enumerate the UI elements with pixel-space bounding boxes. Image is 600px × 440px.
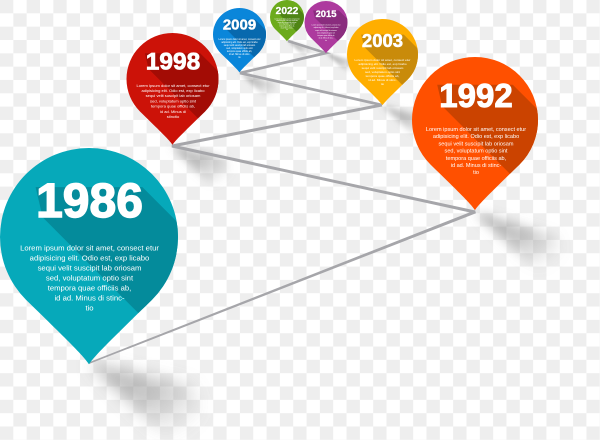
pin: 1998: id ad. Minus di (160, 109, 186, 114)
pin: 1992: tempora quae officiis ab, (446, 156, 507, 162)
pin: 2003: 2003 (362, 30, 403, 51)
zigzag timeline connector (89, 41, 476, 364)
pin: 2003 (347, 19, 418, 106)
pin: 2009: 2009 (223, 16, 256, 34)
pin: 2009: sequi velit suscipit lab oriosam (224, 44, 255, 47)
pin: 1998: 1998 (146, 48, 200, 76)
pin: 2015: adipisicing elit. Odio est, exp licabo (314, 26, 339, 29)
pin: 1992 (412, 57, 538, 210)
shadows cast by the pins (89, 41, 563, 435)
pin: 2009: tempora quae officiis ab, (227, 50, 253, 53)
pin: 1986: 1986 (36, 175, 143, 228)
pin: 1992: sequi velit suscipit lab oriosam (439, 141, 514, 147)
pin: 2022 (270, 0, 304, 42)
pin: 1998: adipisicing elit. Odio est, exp licabo (142, 88, 205, 93)
pin: 2022: sequi velit suscipit lab oriosam (278, 21, 297, 24)
pin: 1986 (0, 148, 178, 364)
pin: 1998: stinctio (167, 114, 180, 119)
pin: 1992: id ad. Minus di stinc- (451, 163, 501, 169)
pin: 1986: adipisicing elit. Odio est, exp licabo (30, 254, 149, 263)
pin: 1998: Lorem ipsum dolor sit amet, consect etur (136, 83, 210, 88)
pin: 2003: Lorem ipsum dolor sit amet, consect etur (355, 58, 410, 62)
pin: 2009: Lorem ipsum dolor sit amet, consect etur (218, 38, 261, 41)
pin: 1998: sed, voluptatum optio sint (150, 98, 197, 103)
pin: 1992: adipisicing elit. Odio est, exp licabo (433, 134, 519, 140)
pin: 1992: tio (473, 170, 479, 176)
pin: 1986: tio (85, 304, 94, 313)
pin: 2015: 2015 (316, 8, 336, 19)
pin: 2009: id ad. Minus di stinc- (229, 53, 250, 56)
pin: 2022: sed, voluptatum optio sint (279, 23, 295, 26)
pin: 1992: sed, voluptatum optio sint (445, 149, 508, 155)
pin: 2009: sed, voluptatum optio sint (226, 47, 253, 50)
pin: 2015 (304, 1, 348, 54)
pin: 2003: sed, voluptatum optio sint (365, 70, 400, 74)
pin: 1992: Lorem ipsum dolor sit amet, consect etur (426, 127, 526, 133)
pin: 2022: tio (286, 28, 288, 31)
pin: 2003: id ad. Minus di stinc- (368, 78, 397, 82)
pin: 2022: id ad. Minus di stinc- (281, 26, 294, 29)
pin: 2015: Lorem ipsum dolor sit amet, consect etur (312, 24, 341, 27)
pin: 2022: tempora quae officiis ab, (279, 24, 295, 28)
pin: 1986: sed, voluptatum optio sint (46, 274, 134, 283)
pin: 1998: sequi velit suscipit lab oriosam (146, 93, 201, 98)
pin: 2022: Lorem ipsum dolor sit amet, consect etur (274, 17, 300, 20)
pin: 2003: tio (381, 82, 384, 86)
pin: 2009: tio (238, 56, 241, 59)
pin: 2022: 2022 (276, 6, 299, 17)
pin: 1986: tempora quae officiis ab, (48, 284, 131, 293)
pin: 2015: id ad. Minus di stinc- (319, 37, 334, 40)
pin: 2015: tempora quae officiis ab, (317, 34, 335, 37)
pin: 2022: adipisicing elit. Odio est, exp licabo (276, 19, 298, 22)
pin: 1998 (126, 33, 218, 145)
pin: 2009 (213, 8, 266, 72)
pin: 2015: tio (325, 39, 327, 42)
pin: 1986: Lorem ipsum dolor sit amet, consect etur (20, 244, 159, 253)
pin: 2003: sequi velit suscipit lab oriosam (362, 66, 404, 70)
pin: 2015: sed, voluptatum optio sint (317, 31, 336, 34)
pin: 2003: tempora quae officiis ab, (366, 74, 399, 78)
pin: 1986: id ad. Minus di stinc- (54, 294, 125, 303)
pin: 2009: adipisicing elit. Odio est, exp licabo (221, 41, 258, 44)
pin: 1986: sequi velit suscipit lab oriosam (38, 264, 141, 273)
pin: 2003: adipisicing elit. Odio est, exp licabo (358, 62, 407, 66)
pin: 1992: 1992 (439, 77, 513, 114)
pin: 2015: sequi velit suscipit lab oriosam (315, 29, 337, 32)
pin: 1998: tempora quae officiis ab, (151, 104, 195, 109)
